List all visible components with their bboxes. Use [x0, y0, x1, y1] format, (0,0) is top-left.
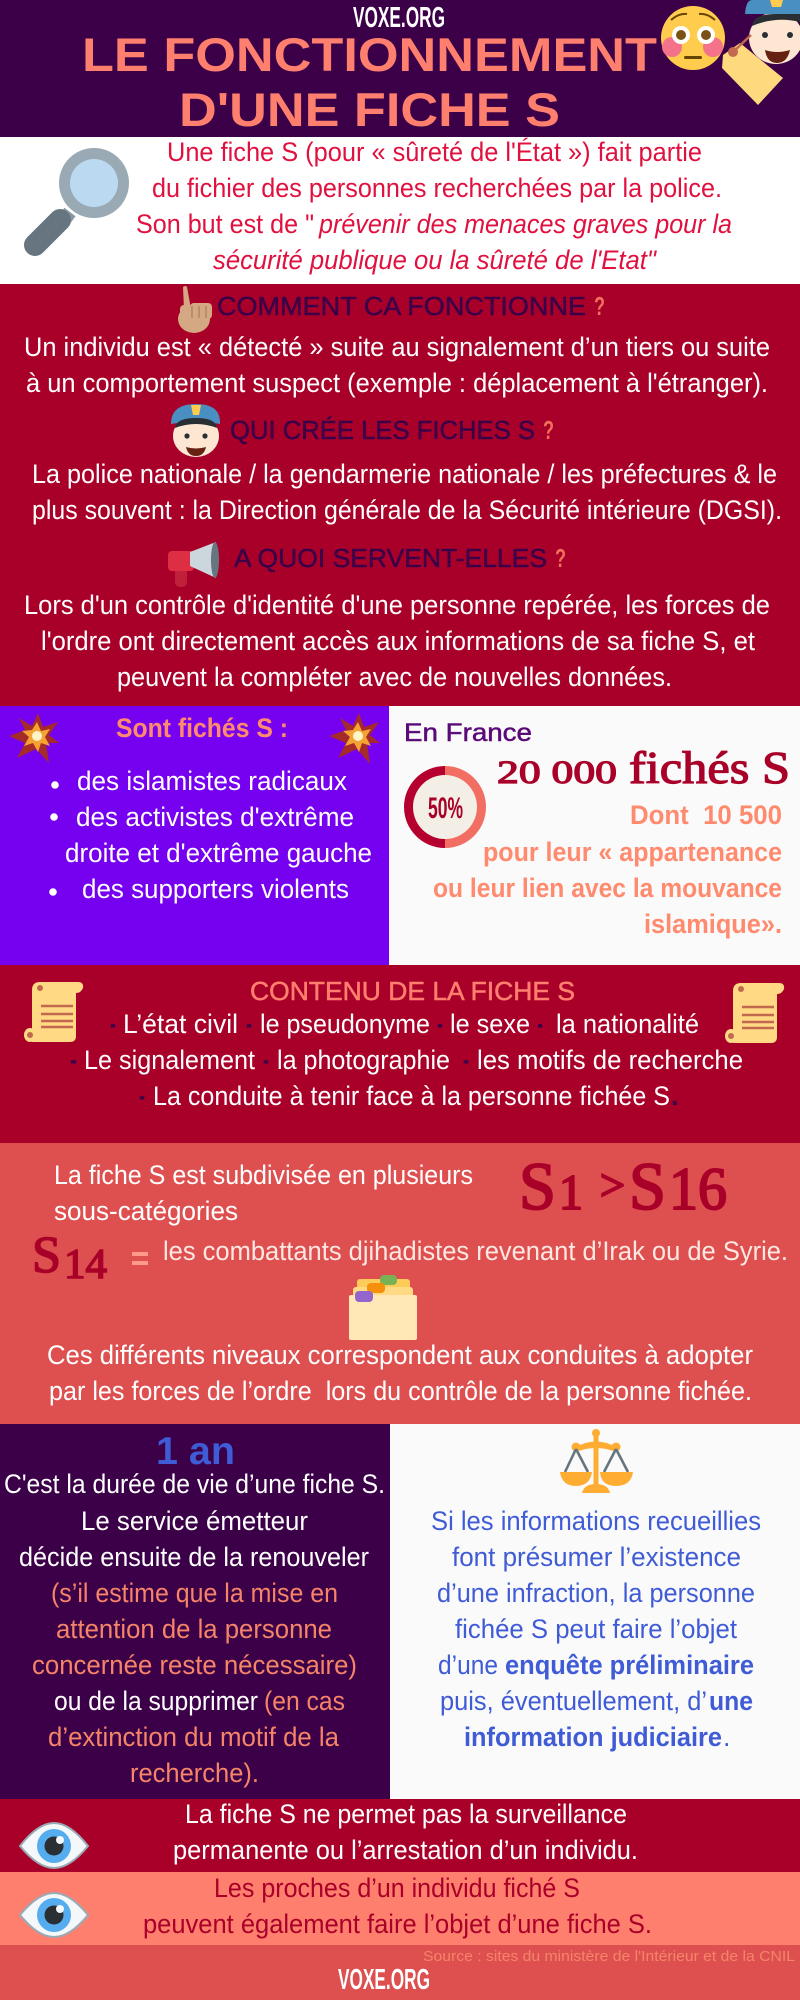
text: proches — [143, 1873, 652, 1939]
list: profils: droite et d'extrême gauche — [65, 838, 372, 868]
text: dont 10 500: islamique». — [644, 909, 782, 939]
panel: surveillance — [0, 1799, 800, 1872]
text: a quoi servent-elles: l'ordre ont directement accès aux informations de sa fiche S, et — [41, 626, 755, 656]
text: definition: sécurité publique ou la sûreté de l'Etat" — [213, 245, 657, 275]
text: duree de vie: décide ensuite de la renouveler — [19, 1542, 369, 1572]
text: enquete: font présumer l’existence — [452, 1542, 741, 1572]
icon: eye — [20, 1823, 88, 1868]
list: profils: des activistes d'extrême — [76, 802, 354, 832]
text: duree de vie: recherche). — [130, 1758, 259, 1788]
list: contenu — [70, 1008, 743, 1111]
text: enquete: Si les informations recueillies — [431, 1506, 761, 1536]
stat: S14: S — [32, 1227, 61, 1284]
title: LE FONCTIONNEMENT — [82, 28, 657, 81]
stat: 20 000 fiches S — [497, 743, 790, 793]
stat: 20 000 fiches S: 20 000 — [497, 755, 617, 791]
equals sign — [132, 1252, 148, 1265]
list: contenu: - — [437, 1008, 443, 1039]
text: a quoi servent-elles — [24, 590, 770, 692]
list: contenu: les motifs de recherche — [477, 1045, 743, 1075]
brand: VOXE.ORG top: VOXE.ORG — [353, 2, 445, 34]
panel: header — [0, 0, 800, 137]
heading: comment ca fonctionne: ? — [594, 291, 605, 321]
text: dont 10 500: pour leur « appartenance — [483, 837, 782, 867]
text: duree de vie: (s’il estime que la mise en — [51, 1578, 338, 1608]
list: contenu: . — [671, 1080, 679, 1111]
text: surveillance — [173, 1799, 638, 1865]
stat: 20 000 fiches S: fichés S — [629, 743, 790, 793]
heading: comment ca fonctionne: COMMENT CA FONCTIONNE — [217, 291, 586, 321]
icon: explosion left — [9, 713, 59, 763]
text: dont 10 500 — [433, 800, 782, 939]
list: contenu: - — [110, 1008, 116, 1039]
panel: contenu de la fiche — [0, 965, 800, 1143]
text: comment ca fonctionne — [24, 332, 770, 398]
icon: scales of justice — [560, 1429, 633, 1493]
list: profils — [49, 766, 372, 904]
chart: 50% donut — [404, 766, 486, 848]
icon: policeman — [171, 404, 220, 457]
text: comment ca fonctionne: à un comportement suspect (exemple : déplacement à l'étranger). — [26, 368, 768, 398]
text: duree de vie: C'est la durée de vie d’une fiche S. — [4, 1469, 385, 1499]
list: contenu: - — [70, 1044, 77, 1075]
text: niveaux — [47, 1340, 753, 1406]
stat: S1 > S16 — [519, 1148, 727, 1224]
text: enquete: d’une — [438, 1650, 498, 1680]
text: a quoi servent-elles: Lors d'un contrôle d'identité d'une personne repérée, les forces de — [24, 590, 770, 620]
icon: scroll left — [24, 982, 83, 1042]
text: proches: peuvent également faire l’objet d’une fiche S. — [143, 1909, 652, 1939]
text: duree de vie: (en cas — [264, 1686, 345, 1716]
icon: pointing finger — [178, 286, 212, 333]
text: comment ca fonctionne: Un individu est « détecté » suite au signalement d’un tiers ou suite — [24, 332, 770, 362]
list: contenu: Le signalement — [84, 1045, 255, 1075]
text: enquete: . — [723, 1722, 731, 1752]
heading: 1 an: 1 an — [156, 1430, 235, 1473]
text: subdivision: sous-catégories — [54, 1196, 238, 1226]
title: D'UNE FICHE S — [179, 83, 560, 136]
heading: a quoi servent-elles: ? — [555, 543, 566, 573]
panel: sous-categories — [0, 1143, 800, 1424]
text: enquete: fichée S peut faire l’objet — [455, 1614, 737, 1644]
text: duree de vie: concernée reste nécessaire) — [32, 1650, 357, 1680]
text: enquete: une — [709, 1686, 753, 1716]
stat: S14: 14 — [64, 1242, 107, 1288]
text: subdivision: La fiche S est subdivisée en plusieurs — [54, 1160, 473, 1190]
list: contenu: - — [246, 1008, 252, 1039]
text: definition — [136, 137, 732, 275]
list: contenu: - — [139, 1080, 145, 1111]
text: proches: Les proches d’un individu fiché S — [214, 1873, 580, 1903]
text: enquete: puis, éventuellement, d’ — [440, 1686, 707, 1716]
stat: S14 — [32, 1227, 107, 1288]
text: subdivision — [54, 1160, 473, 1226]
text: niveaux: Ces différents niveaux correspondent aux conduites à adopter — [47, 1340, 753, 1370]
panel: sont fiches S — [0, 706, 389, 965]
panel: 1 an — [0, 1424, 390, 1799]
stat: S1 > S16: S — [519, 1148, 556, 1224]
heading: en France: En France — [404, 719, 532, 747]
text: enquete: information judiciaire — [464, 1722, 722, 1752]
heading: sont fiches S: Sont fichés S : — [116, 713, 288, 743]
heading: a quoi servent-elles: A QUOI SERVENT-ELLES — [234, 543, 547, 573]
list: profils: des islamistes radicaux — [77, 766, 347, 796]
icon: folder — [349, 1275, 417, 1340]
heading: qui cree les fiches: ? — [543, 415, 554, 445]
panel: en France — [389, 706, 800, 965]
heading: qui cree les fiches: QUI CRÉE LES FICHES S — [230, 415, 535, 445]
text: niveaux: par les forces de l’ordre lors du contrôle de la personne fichée. — [49, 1376, 752, 1406]
list: contenu: L’état civil — [123, 1009, 238, 1039]
heading: contenu de la fiche S: CONTENU DE LA FICHE S — [250, 976, 575, 1006]
stat: S1 > S16: 16 — [669, 1156, 727, 1222]
text: a quoi servent-elles: peuvent la compléter avec de nouvelles données. — [117, 662, 672, 692]
list: contenu: le pseudonyme — [260, 1009, 430, 1039]
text: enquete — [431, 1506, 761, 1752]
panel: enquete — [390, 1424, 800, 1799]
icon: megaphone — [168, 542, 219, 587]
text: duree de vie: Le service émetteur — [81, 1506, 308, 1536]
brand: VOXE.ORG bottom: VOXE.ORG — [338, 1964, 430, 1996]
panel: proches — [0, 1872, 800, 1945]
list: contenu: - — [263, 1044, 269, 1075]
text: definition: du fichier des personnes recherchées par la police. — [152, 173, 722, 203]
text: duree de vie: attention de la personne — [56, 1614, 332, 1644]
text: duree de vie: ou de la supprimer — [54, 1686, 258, 1716]
icon: policeman top right — [745, 0, 800, 64]
panel: footer — [0, 1945, 800, 2000]
list: contenu: la photographie — [277, 1045, 450, 1075]
panel: explanations — [0, 284, 800, 706]
list: profils: des supporters violents — [82, 874, 349, 904]
icon: tag — [722, 35, 783, 105]
list: contenu: La conduite à tenir face à la personne fichée S — [153, 1081, 670, 1111]
text: surveillance: permanente ou l’arrestation d’un individu. — [173, 1835, 638, 1865]
text: surveillance: La fiche S ne permet pas la surveillance — [185, 1799, 627, 1829]
list: contenu: le sexe — [450, 1009, 530, 1039]
stat: S1 > S16: 1 — [559, 1164, 583, 1220]
text: duree de vie: d’extinction du motif de la — [48, 1722, 340, 1752]
icon: magnifying glass — [35, 148, 129, 245]
icon: flushed emoji — [661, 6, 725, 70]
list: contenu: - — [463, 1044, 469, 1075]
text: definition: Son but est de " — [136, 209, 314, 239]
text: enquete: d’une infraction, la personne — [437, 1578, 755, 1608]
stat: S1 > S16: > — [600, 1161, 625, 1210]
list: contenu: - — [537, 1008, 543, 1039]
text: duree de vie — [4, 1469, 385, 1788]
text: definition: prévenir des menaces graves pour la — [318, 209, 732, 239]
text: enquete: enquête préliminaire — [505, 1650, 754, 1680]
chart: 50% donut: 50% — [428, 792, 463, 825]
title — [82, 28, 657, 136]
text: qui cree les fiches — [32, 459, 782, 525]
source: Source : sites du ministère de l'Intérieur et de la CNIL — [423, 1949, 795, 1965]
stat: S1 > S16: S — [629, 1148, 666, 1224]
panel: definition — [0, 137, 800, 284]
text: definition: Une fiche S (pour « sûreté de l'État ») fait partie — [167, 137, 702, 167]
text: dont 10 500: Dont 10 500 — [630, 800, 782, 830]
icon: scroll right — [725, 983, 784, 1043]
icon: eye — [20, 1893, 88, 1937]
list: contenu: la nationalité — [556, 1009, 699, 1039]
icon: explosion right — [329, 713, 380, 764]
